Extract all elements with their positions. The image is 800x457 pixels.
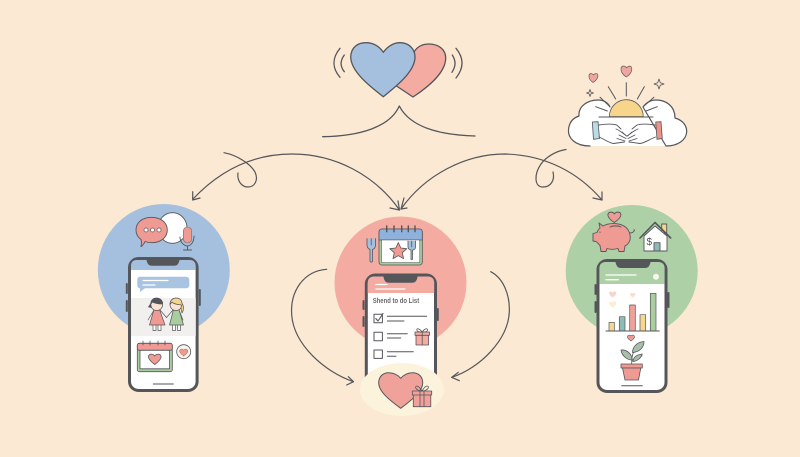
dots: [144, 228, 161, 232]
phone: blue conversation: [127, 258, 200, 390]
list title: Shend to do List: [373, 296, 420, 305]
header lines: [376, 284, 405, 289]
message lines: [143, 280, 168, 285]
arrow: loop left: [224, 153, 256, 187]
notch: [146, 258, 180, 266]
pink bubble: [136, 217, 167, 247]
home indicator: [622, 385, 642, 387]
heart badge: [177, 345, 191, 359]
calendar heart: [148, 354, 161, 364]
girl one: [153, 324, 161, 330]
photo panel: [131, 298, 196, 336]
gift: [412, 386, 432, 407]
calendar: [137, 341, 172, 372]
horizon and sun rays: [596, 83, 657, 117]
star: [390, 242, 407, 259]
pig details: [600, 226, 634, 233]
list item two: [374, 332, 407, 341]
phone: green savings: [596, 260, 668, 392]
arrow: left curve to heart: [292, 269, 354, 385]
fork: [367, 238, 376, 262]
microphone: [180, 227, 194, 250]
phone: pink shared list: [364, 275, 438, 397]
circle: pink: [334, 216, 466, 348]
pig body: [593, 223, 630, 252]
arrow: right curve to heart: [452, 272, 509, 381]
coin heart: [608, 212, 621, 222]
arrow: loop right: [536, 150, 566, 187]
sun: [609, 100, 643, 117]
notch: [383, 275, 418, 283]
header dot: [653, 274, 659, 280]
screen header: [599, 262, 665, 284]
arrow: centre to right phone: [401, 154, 602, 209]
sparkles: [586, 79, 664, 96]
list item three: [374, 350, 413, 358]
circle: green: [566, 205, 698, 337]
plant in pot: [621, 342, 644, 380]
phone body: [130, 258, 197, 390]
icon: overlapping hearts: [334, 43, 462, 97]
connector: brace under hearts: [323, 106, 475, 137]
icon: cloud with sun and joined hands: [568, 66, 687, 146]
roof: [640, 222, 671, 238]
girl two: [172, 324, 180, 330]
icon: speech bubbles and microphone: [136, 213, 194, 250]
calendar rings: [387, 226, 415, 232]
dollar sign: $: [647, 237, 653, 248]
white bubble: [158, 213, 187, 243]
circle: blue: [98, 204, 230, 336]
icon: piggy bank and heart: [593, 212, 634, 252]
arrow: heart to left phone and centre: [193, 154, 400, 210]
phone body: [598, 260, 666, 392]
calendar body: [379, 229, 422, 265]
hands: [599, 124, 656, 144]
small hearts: [589, 66, 632, 82]
phone body: [366, 275, 436, 397]
header lines: [606, 275, 636, 280]
icon: house with dollar: [640, 222, 671, 251]
figures: two girls holding hands: [148, 298, 184, 330]
cuffs: [592, 122, 600, 139]
icon: gift: [415, 329, 430, 345]
side buttons: [596, 285, 668, 312]
bar chart: [606, 293, 659, 331]
door: [654, 243, 660, 251]
small fork: [408, 241, 416, 260]
icon: heart with gift: [379, 373, 432, 408]
screen header: [368, 276, 434, 293]
faint hearts: [609, 291, 635, 308]
icon: calendar with star and cutlery: [367, 226, 422, 265]
calendar page: [382, 240, 420, 262]
home indicator: [153, 383, 173, 385]
house body: [644, 226, 667, 251]
side buttons: [127, 284, 200, 311]
side buttons: [364, 301, 438, 326]
message bubble: [137, 277, 189, 292]
highlight: cream ellipse: [360, 363, 444, 416]
screen header: [131, 260, 196, 270]
small heart: [627, 335, 635, 341]
chimney: [662, 224, 667, 233]
notch: [615, 260, 651, 268]
checked item: [374, 314, 427, 323]
calendar header: [379, 229, 422, 240]
